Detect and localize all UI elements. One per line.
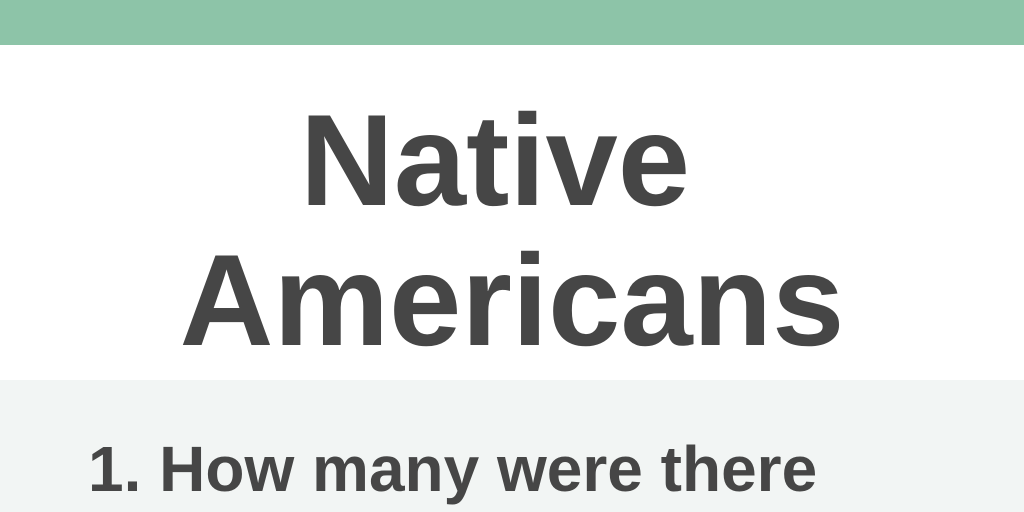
question heading: 1. How many were there [88,433,817,505]
title: Americans [180,227,844,373]
top green banner [0,0,1024,45]
section panel: question 1 [0,380,1024,512]
title [180,87,844,373]
title: Native [300,87,690,233]
